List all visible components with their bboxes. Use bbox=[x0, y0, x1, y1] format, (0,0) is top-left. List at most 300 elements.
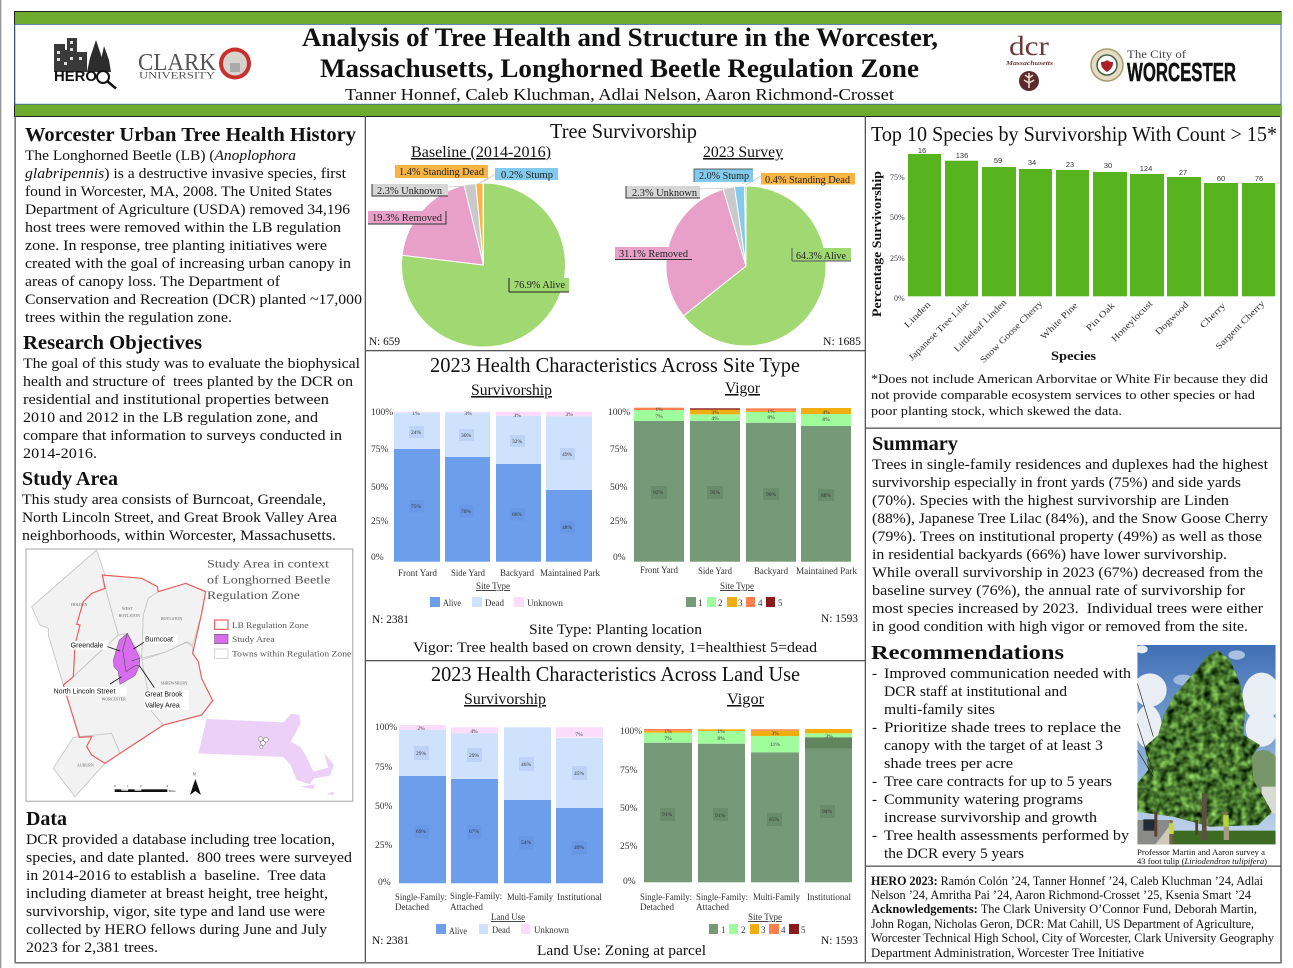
chart: vigor by land use: 94% bbox=[822, 809, 832, 815]
chart: survivorship by site type: Maintained Park bbox=[540, 568, 600, 578]
chart heading: baseline: Baseline (2014-2016) bbox=[411, 144, 551, 161]
panel: Recommendations bbox=[871, 642, 1284, 866]
footnote: *Does not include American Arborvitae or White Fir because they did bbox=[871, 371, 1269, 386]
chart: vigor by land use bbox=[620, 691, 858, 947]
chart: survivorship by site type: Backyard bbox=[500, 568, 534, 578]
pie labels: baseline bbox=[368, 165, 569, 292]
bar chart: species survivorship: 30 bbox=[1104, 161, 1112, 170]
sample size: 2023: N: 1685 bbox=[823, 334, 861, 348]
history text: trees within the regulation zone. bbox=[25, 310, 232, 326]
summary text: most species increased by 2023. Individual trees were either bbox=[872, 601, 1263, 617]
scale bar: 0 bbox=[114, 784, 116, 788]
legend: Alive bbox=[443, 598, 461, 608]
history text: found in Worcester, MA, 2008. The United States bbox=[25, 184, 332, 200]
chart: vigor by land use: 3% bbox=[771, 731, 779, 737]
recommendations list: - bbox=[872, 774, 877, 790]
chart: vigor by land use: 3% bbox=[825, 734, 833, 740]
logo: HERO: HERO bbox=[54, 69, 97, 85]
chart: survivorship by site type: 100% bbox=[371, 408, 393, 418]
chart: vigor by site type: 50% bbox=[610, 483, 628, 493]
chart: vigor by site type: 3% bbox=[711, 410, 719, 416]
chart: vigor by land use: Vigor bbox=[727, 691, 765, 708]
map legend: Study Area bbox=[232, 635, 275, 644]
town names: WORCESTER bbox=[102, 697, 126, 702]
chart: vigor by land use: Attached bbox=[696, 902, 730, 912]
heading: Data bbox=[26, 808, 67, 830]
chart: survivorship by land use: 4% bbox=[470, 729, 478, 735]
recommendations list: - bbox=[872, 792, 877, 808]
recommendations list: Tree health assessments performed by bbox=[884, 828, 1130, 844]
chart: vigor by land use: N: 1593 bbox=[821, 933, 858, 947]
history text bbox=[25, 148, 362, 326]
legend bbox=[686, 597, 783, 608]
chart: vigor by land use: 25% bbox=[620, 842, 638, 852]
recommendations list: increase survivorship and growth bbox=[884, 810, 1098, 826]
chart: vigor by land use: Single-Family: bbox=[696, 892, 748, 902]
chart: vigor by site type: 8% bbox=[767, 415, 775, 421]
pie labels: baseline: 2.3% Unknown bbox=[377, 186, 442, 197]
logo: Clark University: CLARK bbox=[138, 50, 217, 76]
panel: Health Characteristics Across Land Use bbox=[372, 662, 858, 959]
chart: survivorship by land use: 45% bbox=[574, 771, 584, 777]
bar chart: species survivorship: Pin Oak bbox=[1084, 300, 1117, 333]
panel: credits and acknowledgements: Department Administration, Worcester Tree Initiative bbox=[871, 946, 1144, 960]
chart: vigor by site type: 7% bbox=[655, 414, 663, 420]
neighbourhood labels: Great Brook bbox=[145, 692, 183, 699]
objectives text: 2010 and 2012 in the LB regulation zone, and bbox=[23, 410, 319, 426]
objectives text: The goal of this study was to evaluate the biophysical bbox=[23, 356, 360, 372]
bar chart: species survivorship: Snow Goose Cherry bbox=[978, 298, 1045, 365]
panel: Data bbox=[26, 808, 353, 956]
chart: vigor by site type: Side Yard bbox=[698, 566, 732, 576]
history text: zone. In response, tree planting initiatives were bbox=[25, 238, 327, 254]
logo: DCR Massachusetts: Massachusetts bbox=[1005, 61, 1054, 67]
background tree and house bbox=[1252, 750, 1276, 816]
recommendations list: canopy with the target of at least 3 bbox=[884, 738, 1103, 754]
heading: Research Objectives bbox=[23, 332, 202, 354]
legend: 4 bbox=[758, 598, 763, 608]
legend: Unknown bbox=[534, 925, 569, 935]
panel: credits and acknowledgements: Acknowledgements: The Clark University O’Connor Fund, Deborah Martin, bbox=[871, 902, 1257, 916]
chart: survivorship by land use: Institutional bbox=[557, 892, 603, 902]
bottom green bar bbox=[15, 104, 1281, 116]
chart: survivorship by site type: 3% bbox=[464, 411, 472, 417]
neighbourhood labels: Greendale bbox=[71, 643, 103, 650]
scale bar: Miles bbox=[169, 789, 176, 793]
bar chart: species survivorship: 60 bbox=[1217, 174, 1225, 183]
chart: survivorship by site type: Site Type bbox=[476, 581, 510, 591]
bar chart: species survivorship: 59 bbox=[994, 156, 1002, 165]
recommendations list: Tree care contracts for up to 5 years bbox=[884, 774, 1112, 790]
summary text: (70%). Species with the highest survivorship are Linden bbox=[872, 493, 1230, 509]
bar chart: species survivorship: Linden bbox=[902, 299, 933, 330]
chart: survivorship by land use: 100% bbox=[375, 723, 397, 733]
map legend: LB Regulation Zone bbox=[232, 621, 309, 630]
town names: SHREWSBURY bbox=[161, 680, 188, 685]
pie labels: baseline: 1.4% Standing Dead bbox=[399, 167, 484, 178]
pie labels: 2023 survey: 2.0% Stump bbox=[699, 171, 749, 182]
study area text: North Lincoln Street, and Great Brook Valley Area bbox=[22, 510, 337, 526]
legend: 2 bbox=[741, 925, 746, 935]
land use definition: Land Use: Zoning at parcel bbox=[537, 943, 706, 959]
legend bbox=[436, 924, 569, 936]
footnote bbox=[871, 371, 1269, 418]
data text: DCR provided a database including tree location, bbox=[26, 832, 335, 848]
bar chart: species survivorship: Cherry bbox=[1198, 300, 1228, 330]
chart: vigor by site type: 92% bbox=[710, 490, 720, 496]
chart: survivorship by land use: 50% bbox=[375, 802, 392, 812]
data text: survivorship, vigor, site type and land use were bbox=[26, 904, 325, 920]
history text: The Longhorned Beetle (LB) ( Anoplophora bbox=[25, 148, 296, 164]
chart: vigor by site type: 88% bbox=[821, 493, 831, 499]
logo: DCR Massachusetts bbox=[1005, 31, 1054, 91]
chart: vigor by site type: 1% bbox=[767, 409, 775, 415]
legend: 3 bbox=[738, 598, 743, 608]
chart: survivorship by land use: Single-Family: bbox=[450, 891, 502, 901]
map: study area in regulation zone bbox=[26, 549, 353, 801]
study area text: This study area consists of Burncoat, Greendale, bbox=[22, 492, 326, 508]
chart: survivorship by site type: 25% bbox=[371, 517, 388, 527]
bar chart: species survivorship: Honeylocust bbox=[1109, 298, 1155, 344]
chart: survivorship by site type: 66% bbox=[512, 512, 522, 518]
chart: survivorship by land use: Detached bbox=[395, 902, 429, 912]
bar chart: species survivorship: 34 bbox=[1028, 158, 1036, 167]
recommendations list: DCR staff at institutional and bbox=[884, 684, 1068, 700]
chart: vigor by site type: 1% bbox=[655, 407, 663, 413]
chart: vigor by site type: N: 1593 bbox=[821, 611, 858, 625]
town names: BOYLSTON bbox=[161, 616, 182, 621]
chart: vigor by land use: 0% bbox=[623, 877, 636, 887]
chart: vigor by land use: 100% bbox=[620, 727, 642, 737]
chart: survivorship by land use: 2% bbox=[417, 726, 425, 732]
legend: 1 bbox=[698, 598, 702, 608]
chart: survivorship by land use: 25% bbox=[375, 841, 392, 851]
objectives text bbox=[23, 356, 360, 462]
heading: Recommendations bbox=[871, 642, 1064, 664]
logo: DCR Massachusetts: dcr bbox=[1009, 31, 1049, 61]
chart: vigor by site type: 4% bbox=[822, 410, 830, 416]
chart: vigor by site type: 75% bbox=[610, 445, 628, 455]
data text bbox=[26, 832, 353, 956]
definitions text bbox=[413, 622, 818, 656]
chart: survivorship by site type: 0% bbox=[371, 553, 384, 563]
chart: vigor by site type: 8% bbox=[822, 417, 830, 423]
summary text: in residential backyards (66%) have lower survivorship. bbox=[872, 547, 1227, 563]
chart: survivorship by site type: 32% bbox=[512, 439, 522, 445]
chart: vigor by land use: Site Type bbox=[748, 912, 782, 922]
chart: survivorship by land use: 67% bbox=[469, 829, 479, 835]
history text: Conservation and Recreation (DCR) planted ~17,000 bbox=[25, 292, 362, 308]
chart: vigor by land use: 75% bbox=[620, 766, 638, 776]
neighbourhood labels bbox=[53, 635, 189, 710]
chart: survivorship by site type: 30% bbox=[461, 433, 471, 439]
chart: vigor by land use: Single-Family: bbox=[640, 892, 692, 902]
bar chart: species survivorship: 23 bbox=[1066, 160, 1074, 169]
bar chart: species survivorship: Sargent Cherry bbox=[1213, 298, 1267, 351]
map legend: Towns within Regulation Zone bbox=[232, 649, 352, 658]
chart: vigor by site type: 0% bbox=[613, 553, 626, 563]
chart: survivorship by site type: 75% bbox=[371, 445, 388, 455]
panel: Study Area bbox=[22, 468, 337, 544]
recommendations list: shade trees per acre bbox=[884, 756, 1013, 772]
legend: 1 bbox=[721, 925, 726, 935]
heading: Tree Survivorship bbox=[550, 119, 697, 143]
recommendations list: Prioritize shade trees to replace the bbox=[884, 720, 1121, 736]
top green bar bbox=[15, 12, 1281, 24]
photo caption: 43 foot tulip (Liriodendron tulipifera) bbox=[1137, 856, 1267, 866]
pie labels: 2023 survey bbox=[615, 169, 855, 262]
chart: vigor by site type: Site Type bbox=[720, 581, 754, 591]
chart: survivorship by site type: 24% bbox=[411, 430, 421, 436]
history text: areas of canopy loss. The Department of bbox=[25, 274, 280, 290]
objectives text: health and structure of trees planted by the DCR on bbox=[23, 374, 354, 390]
heading: Summary bbox=[872, 433, 959, 455]
logo: Clark University: UNIVERSITY bbox=[139, 72, 215, 82]
chart: survivorship by site type: 75% bbox=[411, 504, 421, 510]
chart: vigor by site type: Backyard bbox=[754, 566, 788, 576]
chart: vigor by site type: 4% bbox=[711, 416, 719, 422]
north arrow bbox=[190, 772, 201, 795]
summary text: in good condition with high vigor or removed from the site. bbox=[872, 619, 1248, 635]
street and lawn bbox=[1137, 820, 1171, 845]
chart: survivorship by site type: 70% bbox=[461, 509, 471, 515]
chart: survivorship by site type: Side Yard bbox=[451, 568, 485, 578]
chart: vigor by site type: 25% bbox=[610, 517, 628, 527]
title bbox=[302, 23, 938, 104]
north arrow: N bbox=[193, 772, 197, 777]
logo: City of Worcester: WORCESTER bbox=[1127, 57, 1236, 87]
chart: survivorship by site type: 1% bbox=[412, 411, 420, 417]
recommendations list: - bbox=[872, 666, 877, 682]
bar chart: species survivorship: 27 bbox=[1179, 168, 1187, 177]
heading: Study Area bbox=[22, 468, 118, 490]
chart: survivorship by site type: 48% bbox=[562, 525, 572, 531]
summary text bbox=[872, 457, 1269, 635]
town names: WEST bbox=[122, 606, 133, 611]
chart: vigor by site type bbox=[608, 380, 858, 625]
chart: vigor by land use: 85% bbox=[769, 817, 779, 823]
pie labels: baseline: 76.9% Alive bbox=[514, 280, 566, 291]
chart: survivorship by land use: 54% bbox=[521, 840, 531, 846]
data text: collected by HERO fellows during June and July bbox=[26, 922, 328, 938]
summary text: (88%), Japanese Tree Lilac (84%), and the Snow Goose Cherry bbox=[872, 511, 1269, 527]
chart: survivorship by site type: 3% bbox=[565, 412, 573, 418]
neighbourhood labels: Burncoat bbox=[145, 637, 173, 644]
pie labels: 2023 survey: 31.1% Removed bbox=[619, 249, 688, 260]
data text: species, and date planted. 800 trees were surveyed bbox=[26, 850, 353, 866]
legend: 5 bbox=[801, 925, 806, 935]
study area polygon bbox=[113, 633, 140, 684]
recommendations list: the DCR every 5 years bbox=[884, 846, 1024, 862]
chart: survivorship by land use: 46% bbox=[521, 762, 531, 768]
chart: vigor by site type: 100% bbox=[608, 408, 630, 418]
panel: Research Objectives bbox=[23, 332, 360, 462]
recommendations list: multi-family sites bbox=[884, 702, 995, 718]
logo: HERO bbox=[54, 38, 116, 88]
legend: 5 bbox=[778, 598, 783, 608]
title: Massachusetts, Longhorned Beetle Regulation Zone bbox=[320, 54, 919, 83]
objectives text: compare that information to surveys conducted in bbox=[23, 428, 343, 444]
chart: vigor by land use: 8% bbox=[717, 736, 725, 742]
recommendations list: - bbox=[872, 720, 877, 736]
bar chart: species survivorship: 75% bbox=[890, 173, 905, 182]
chart heading: 2023 survey: 2023 Survey bbox=[703, 144, 783, 161]
chart: survivorship by land use: Multi-Family bbox=[507, 892, 553, 902]
legend: Unknown bbox=[527, 598, 564, 608]
town polygons bbox=[32, 550, 213, 797]
chart: vigor by site type: 90% bbox=[766, 492, 776, 498]
map legend bbox=[215, 620, 352, 658]
authors: Tanner Honnef, Caleb Kluchman, Adlai Nelson, Aaron Richmond-Crosset bbox=[345, 85, 894, 104]
town names bbox=[71, 602, 188, 768]
recommendations list: Improved communication needed with bbox=[884, 666, 1132, 682]
bar chart: species survivorship: 16 bbox=[918, 146, 926, 155]
chart: survivorship by site type: 49% bbox=[562, 452, 572, 458]
header banner bbox=[14, 12, 1281, 116]
summary text: Trees in single-family residences and duplexes had the highest bbox=[872, 457, 1269, 473]
chart: survivorship by land use: 75% bbox=[375, 763, 392, 773]
chart: survivorship by land use: N: 2381 bbox=[372, 933, 409, 947]
map title: Regulation Zone bbox=[207, 588, 300, 602]
panel: Top 10 Species bbox=[870, 122, 1277, 418]
scale bar bbox=[114, 784, 176, 793]
chart: vigor by land use: Detached bbox=[640, 902, 674, 912]
pie labels: 2023 survey: 2.3% Unknown bbox=[632, 188, 697, 199]
chart: vigor by site type: Maintained Park bbox=[796, 566, 857, 576]
chart: vigor by land use: Multi-Family bbox=[753, 892, 800, 902]
map title: Study Area in context bbox=[207, 556, 330, 570]
panel: Health Characteristics Across Site Type bbox=[371, 353, 858, 656]
heading: 2023 Health Characteristics Across Land Use bbox=[431, 662, 800, 686]
map title bbox=[207, 556, 330, 602]
bar chart: species survivorship: 0% bbox=[894, 294, 905, 303]
panel: Worcester Urban Tree Health History bbox=[25, 124, 362, 326]
town names: AUBURN bbox=[77, 763, 94, 768]
regulation zone outline bbox=[63, 575, 213, 763]
logo: City of Worcester: The City of bbox=[1127, 47, 1186, 61]
neighbourhood labels: North Lincoln Street bbox=[54, 689, 115, 696]
bar chart: species survivorship: 124 bbox=[1140, 164, 1152, 173]
map title: of Longhorned Beetle bbox=[207, 572, 330, 586]
chart: vigor by site type: Vigor bbox=[725, 380, 761, 397]
bar chart: species survivorship: 50% bbox=[890, 213, 905, 222]
chart: vigor by site type: Front Yard bbox=[640, 565, 678, 575]
bar chart: species survivorship bbox=[870, 146, 1275, 365]
definitions text: Site Type: Planting location bbox=[529, 622, 703, 638]
summary text: While overall survivorship in 2023 (67%) decreased from the bbox=[872, 565, 1263, 581]
history text: host trees were removed within the LB regulation bbox=[25, 220, 342, 236]
chart: survivorship by land use: 0% bbox=[378, 878, 391, 888]
summary text: (79%). Trees on institutional property (49%) as well as those bbox=[872, 529, 1262, 545]
photo caption bbox=[1137, 847, 1267, 866]
footnote: not provide comparable ecosystem services to other species or had bbox=[871, 387, 1256, 402]
neighbourhood labels: Valley Area bbox=[145, 703, 180, 710]
study area text: neighborhoods, within Worcester, Massachusetts. bbox=[22, 528, 336, 544]
chart: vigor by land use: 91% bbox=[715, 813, 725, 819]
legend bbox=[709, 924, 806, 935]
panel: credits and acknowledgements: John Rogan, Nicholas Geron, DCR: Mat Cahill, US Department of Agriculture, bbox=[871, 917, 1254, 931]
panel: credits and acknowledgements: Nelson ’24, Amritha Pai ’24, Aaron Richmond-Crosset ’25, Ksenia Smart ’24 bbox=[871, 888, 1252, 902]
pie labels: baseline: 19.3% Removed bbox=[372, 213, 442, 224]
definitions text: Vigor: Tree health based on crown density, 1=healthiest 5=dead bbox=[413, 640, 818, 656]
chart: vigor by land use: Institutional bbox=[807, 892, 852, 902]
Massachusetts inset map bbox=[198, 713, 334, 796]
logo: City of Worcester bbox=[1091, 47, 1236, 87]
panel: credits and acknowledgements: HERO 2023: Ramón Colón ’24, Tanner Honnef ’24, Caleb Kluchman ’24, Adlai bbox=[871, 874, 1264, 888]
study area text bbox=[22, 492, 337, 544]
chart: survivorship by site type: 3% bbox=[513, 413, 521, 419]
trunks and surveyors bbox=[1202, 793, 1207, 840]
chart: vigor by land use: 1% bbox=[717, 729, 725, 735]
pie labels: baseline: 0.2% Stump bbox=[501, 170, 553, 181]
chart: vigor by land use: 1% bbox=[664, 729, 672, 735]
panel: credits and acknowledgements bbox=[871, 874, 1275, 960]
legend: Dead bbox=[485, 598, 504, 608]
chart: vigor by land use: 7% bbox=[664, 736, 672, 742]
scale bar: 2 bbox=[140, 784, 142, 788]
chart: vigor by land use: 11% bbox=[770, 742, 780, 748]
title: Analysis of Tree Health and Structure in the Worcester, bbox=[302, 23, 938, 52]
chart: survivorship by land use: 29% bbox=[469, 753, 479, 759]
legend: Dead bbox=[492, 925, 510, 935]
data text: 2023 for 2,381 trees. bbox=[26, 940, 158, 956]
town names: HOLDEN bbox=[71, 602, 87, 607]
chart: survivorship by land use: Land Use bbox=[491, 912, 525, 922]
panel: Tree Survivorship bbox=[368, 119, 861, 348]
summary text: baseline survey (76%), the annual rate of survivorship for bbox=[872, 583, 1245, 599]
clouds bbox=[1133, 645, 1281, 748]
bar chart: species survivorship: 136 bbox=[956, 151, 968, 160]
bar chart: species survivorship: White Pine bbox=[1038, 300, 1079, 341]
sample size: baseline: N: 659 bbox=[369, 334, 400, 348]
heading: 2023 Health Characteristics Across Site Type bbox=[430, 353, 800, 377]
legend: 2 bbox=[718, 598, 722, 608]
pie chart: baseline bbox=[402, 183, 566, 347]
panel: Summary bbox=[872, 433, 1269, 635]
bar chart: species survivorship: Japanese Tree Lilac bbox=[906, 297, 971, 362]
data text: including diameter at breast height, tree height, bbox=[26, 886, 328, 902]
bar chart: species survivorship: 76 bbox=[1255, 174, 1263, 183]
photo caption: Professor Martin and Aaron survey a bbox=[1137, 847, 1265, 857]
heading: Worcester Urban Tree Health History bbox=[25, 124, 357, 146]
recommendations list: Community watering programs bbox=[884, 792, 1083, 808]
bar chart: species survivorship: Dogwood bbox=[1153, 299, 1191, 337]
chart: survivorship by land use: 7% bbox=[575, 732, 583, 738]
legend: Alive bbox=[449, 926, 467, 936]
bar chart: species survivorship: Percentage Survivorship bbox=[870, 171, 884, 317]
bar chart: species survivorship: 25% bbox=[890, 254, 905, 263]
town names: BOYLSTON bbox=[119, 613, 140, 618]
chart: survivorship by land use: Survivorship bbox=[464, 691, 546, 708]
pie labels: 2023 survey: 0.4% Standing Dead bbox=[765, 175, 850, 186]
bar chart: species survivorship: Littleleaf Linden bbox=[952, 297, 1009, 354]
photo: surveyors and tulip tree bbox=[1133, 645, 1284, 845]
recommendations list: - bbox=[872, 828, 877, 844]
tree crown bbox=[1137, 650, 1272, 827]
data text: in 2014-2016 to establish a baseline. Tree data bbox=[26, 868, 326, 884]
recommendations list bbox=[872, 666, 1132, 862]
chart: survivorship by site type: Survivorship bbox=[471, 382, 552, 399]
summary text: survivorship especially in front yards (75%) and side yards bbox=[872, 475, 1241, 491]
pie chart: 2023 survey bbox=[666, 186, 826, 346]
logo: Clark University bbox=[138, 48, 251, 82]
chart: survivorship by site type bbox=[371, 382, 600, 626]
chart: survivorship by land use: 49% bbox=[574, 845, 584, 851]
panel: credits and acknowledgements: Worcester Technical High School, City of Worcester, Clark University Geography bbox=[871, 931, 1275, 945]
chart: survivorship by land use: Attached bbox=[450, 902, 484, 912]
bar chart: species survivorship: Species bbox=[1051, 349, 1096, 363]
chart: survivorship by site type: Front Yard bbox=[398, 568, 437, 578]
